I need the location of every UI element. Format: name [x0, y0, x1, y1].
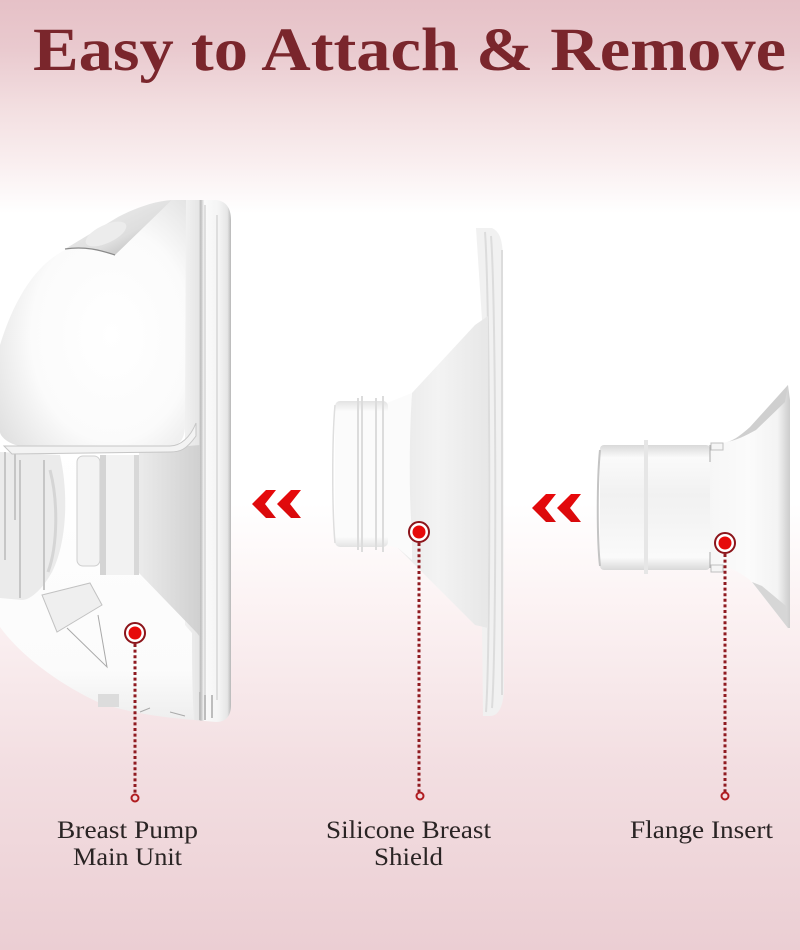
panel: silicone breast shield: [333, 228, 504, 716]
cone: [398, 316, 488, 628]
lower transparent bowl: [0, 445, 200, 720]
panel: flange insert: [598, 385, 790, 628]
flared cone: [708, 385, 790, 628]
top white dome: [0, 200, 186, 446]
label: silicone breast shield: Shield: [374, 844, 444, 871]
button cap: [65, 200, 172, 255]
label: breast pump main unit: Breast Pump: [57, 817, 198, 844]
base marks: [98, 694, 119, 707]
label: flange insert: Flange Insert: [630, 817, 773, 844]
label: breast pump main unit: Main Unit: [73, 844, 182, 871]
panel: breast pump main unit: [0, 200, 231, 722]
threaded neck: [335, 401, 388, 547]
callout: flange marker: [715, 533, 735, 800]
tube: [600, 445, 710, 570]
arrow: left chevrons: [252, 490, 301, 518]
transparent inner cylinders: [0, 452, 139, 600]
plate: [476, 228, 504, 716]
valve: [42, 583, 107, 667]
rim: [185, 200, 231, 722]
arrow: right chevrons: [532, 494, 581, 522]
title: Easy to Attach & Remove: [33, 17, 786, 84]
callout: shield marker: [409, 522, 429, 800]
dome bottom lip: [4, 423, 196, 454]
collar: [387, 393, 412, 560]
label: silicone breast shield: Silicone Breast: [326, 817, 491, 844]
inner grey wall: [139, 445, 200, 637]
callout: main unit marker: [125, 623, 145, 802]
